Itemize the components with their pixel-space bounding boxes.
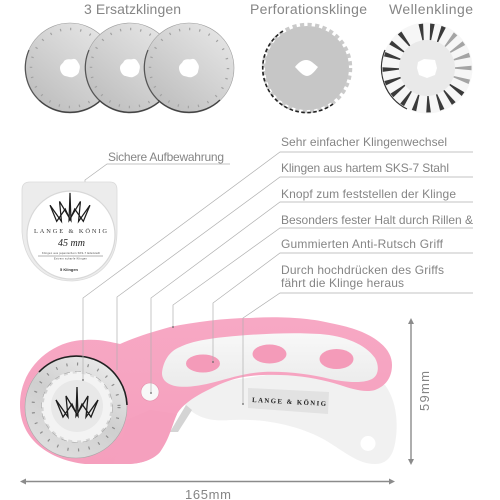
callout: Knopf zum feststellen der Klinge: [150, 187, 473, 394]
brand label: [248, 388, 329, 414]
grip ovals: [186, 354, 220, 372]
icon: blade packaging: 45 mm: [58, 238, 85, 249]
guard: [185, 370, 397, 464]
callout: Besonders fester Halt durch Rillen: [172, 213, 473, 328]
callout: Sehr einfacher Klingenwechsel: Sehr einfacher Klingenwechsel: [281, 135, 447, 149]
callout: Besonders fester Halt durch Rillen: Besonders fester Halt durch Rillen &: [281, 213, 473, 227]
icon: replacement blades: [25, 23, 234, 113]
heading: Perforationsklinge: Perforationsklinge: [250, 1, 367, 17]
heading: 3 Ersatzklingen: 3 Ersatzklingen: [84, 1, 181, 17]
arrow: height dimension: [408, 318, 414, 465]
callout: Sichere Aufbewahrung: [84, 150, 230, 200]
icon: blade packaging: Klingen aus japanischem SKS-7 Edelstahl: [42, 251, 100, 255]
callout: Durch hochdrücken des Griffs: fährt die Klinge heraus: [281, 276, 404, 290]
arrow: width dimension: [20, 478, 395, 484]
blade: [25, 356, 127, 458]
pink body: [20, 317, 392, 464]
icon: blade packaging: LANGE & KÖNIG: [34, 228, 107, 235]
heading: Wellenklinge: Wellenklinge: [389, 1, 473, 17]
locking button: [141, 383, 159, 401]
callout: Klingen aus hartem SKS-7 Stahl: Klingen aus hartem SKS-7 Stahl: [281, 161, 449, 175]
white grip: [162, 333, 378, 387]
callout: Durch hochdrücken des Griffs: [242, 263, 473, 405]
icon: blade packaging: 5 Klingen: [60, 267, 79, 272]
callout: Knopf zum feststellen der Klinge: Knopf zum feststellen der Klinge: [281, 187, 456, 201]
label: 59mm: 59mm: [417, 371, 432, 411]
callout: Sichere Aufbewahrung: Sichere Aufbewahrung: [108, 150, 224, 164]
icon: perforation blade: [263, 24, 350, 113]
icon: wave blade: [381, 22, 472, 114]
callout: Klingen aus hartem SKS-7 Stahl: [117, 161, 473, 370]
callout: Gummierten Anti-Rutsch Griff: [212, 237, 473, 363]
icon: blade packaging: Extrem scharfe Klingen: [54, 256, 88, 260]
callout: Durch hochdrücken des Griffs: Durch hochdrücken des Griffs: [281, 263, 444, 277]
front pink overlap: [113, 410, 177, 464]
callout: Gummierten Anti-Rutsch Griff: Gummierten Anti-Rutsch Griff: [281, 237, 444, 251]
icon: blade packaging: [22, 182, 117, 281]
brand label: LANGE & KÖNIG: [252, 397, 327, 408]
crown logo: [56, 387, 98, 417]
rotary cutter: [20, 317, 397, 464]
